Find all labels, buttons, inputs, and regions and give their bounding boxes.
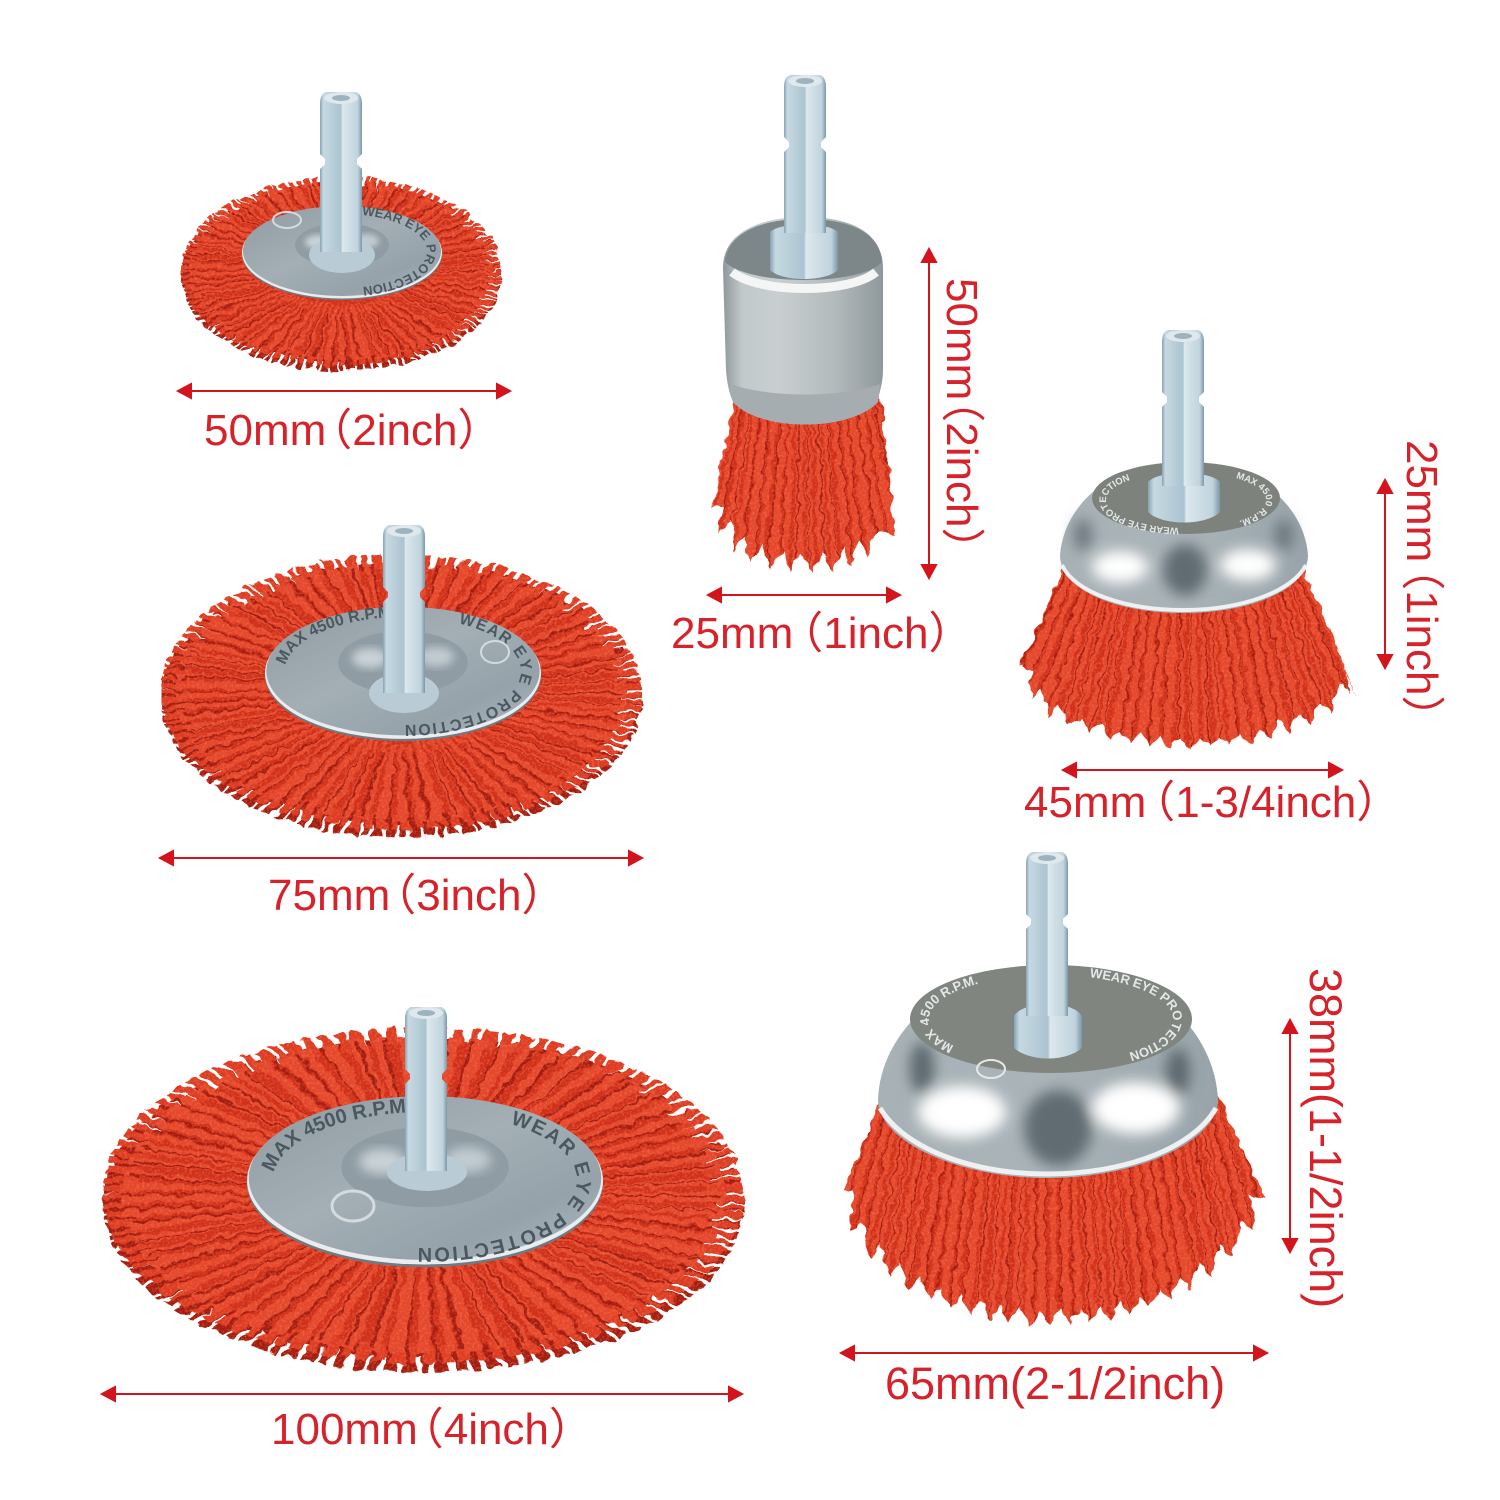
stamped logo — [977, 1060, 1005, 1078]
bristles — [121, 1036, 725, 1363]
hex shank — [383, 525, 425, 693]
stamped marking: WEAR EYE PROTECTIONMAX 4500 R.P.M. — [276, 606, 532, 736]
arrow: 65mm cup height — [1283, 1020, 1297, 1252]
arrow: 50mm width — [178, 384, 510, 398]
bristles — [844, 1096, 1266, 1326]
label: 45mm cup width: 45mm（1-3/4inch） — [1024, 778, 1400, 827]
stamped marking: WEAR EYE PROTECTION MAX 4500 R.P.M. — [1099, 472, 1272, 534]
label: 65mm cup width: 65mm(2-1/2inch) — [885, 1358, 1225, 1409]
bristles — [1019, 568, 1358, 750]
ferrule top — [725, 219, 882, 280]
metal ferrule — [723, 217, 883, 424]
label: 65mm cup height: 38mm(1-1/2inch) — [1300, 968, 1351, 1308]
hub disc — [265, 607, 541, 741]
hub collar — [1014, 1004, 1082, 1058]
shoulder highlight — [732, 272, 876, 288]
hex shank — [1162, 330, 1204, 486]
hub disc — [247, 1096, 603, 1267]
arrow: 100mm width — [102, 1387, 742, 1401]
brush: 100mm flat wheel — [102, 1007, 746, 1374]
metal dome — [1060, 462, 1308, 613]
label: end brush width: 25mm（1inch） — [671, 609, 972, 658]
brush: 25mm end brush — [711, 75, 896, 574]
dome reflections — [1074, 519, 1293, 596]
top plate — [1092, 462, 1280, 534]
label: 45mm cup height: 25mm（1inch） — [1397, 440, 1446, 739]
hex shank — [405, 1007, 447, 1171]
ferrule band — [730, 384, 880, 424]
arrow: end brush height — [922, 249, 936, 578]
label: 75mm width: 75mm（3inch） — [268, 871, 565, 920]
stamped logo — [332, 1191, 374, 1221]
hub boss — [387, 1153, 467, 1191]
stamped marking: WEAR EYE PROTECTIONMAX 4500 R.P.M. — [261, 1098, 592, 1262]
hub disc — [242, 206, 442, 300]
arrow: 45mm cup width — [1063, 763, 1342, 777]
brush: 50mm flat wheel — [180, 92, 502, 373]
arrow: 75mm width — [160, 851, 642, 865]
hub boss — [369, 673, 439, 713]
top plate — [910, 965, 1192, 1073]
hex shank — [320, 92, 362, 252]
hub boss — [309, 237, 375, 273]
brush: 45mm cup — [1019, 330, 1358, 750]
arrow: end brush width — [708, 588, 900, 602]
bristles — [190, 182, 492, 365]
arrow: 65mm cup width — [841, 1346, 1267, 1360]
label: end brush height: 50mm（2inch） — [937, 278, 986, 571]
dome rim — [1062, 565, 1306, 610]
dome rim — [880, 1108, 1216, 1174]
bristles — [711, 396, 896, 574]
stamped marking: WEAR EYE PROTECTION — [363, 206, 436, 296]
label: 50mm width: 50mm（2inch） — [204, 406, 501, 455]
stamped marking: MAX 4500 R.P.M. WEAR EYE PROTECTION — [920, 968, 1182, 1062]
brush: 65mm cup — [844, 852, 1266, 1326]
hub collar — [1148, 473, 1220, 522]
hex shank — [1026, 852, 1068, 1016]
ferrule collar — [770, 224, 838, 279]
stamped logo — [481, 641, 509, 663]
dome reflections — [910, 1042, 1190, 1166]
brush: 75mm flat wheel — [160, 525, 644, 839]
metal dome — [878, 965, 1218, 1178]
bristles — [174, 562, 628, 830]
arrow: 45mm cup height — [1378, 480, 1392, 668]
hex shank — [784, 75, 826, 233]
label: 100mm width: 100mm（4inch） — [271, 1405, 593, 1454]
stamped logo — [273, 212, 301, 228]
